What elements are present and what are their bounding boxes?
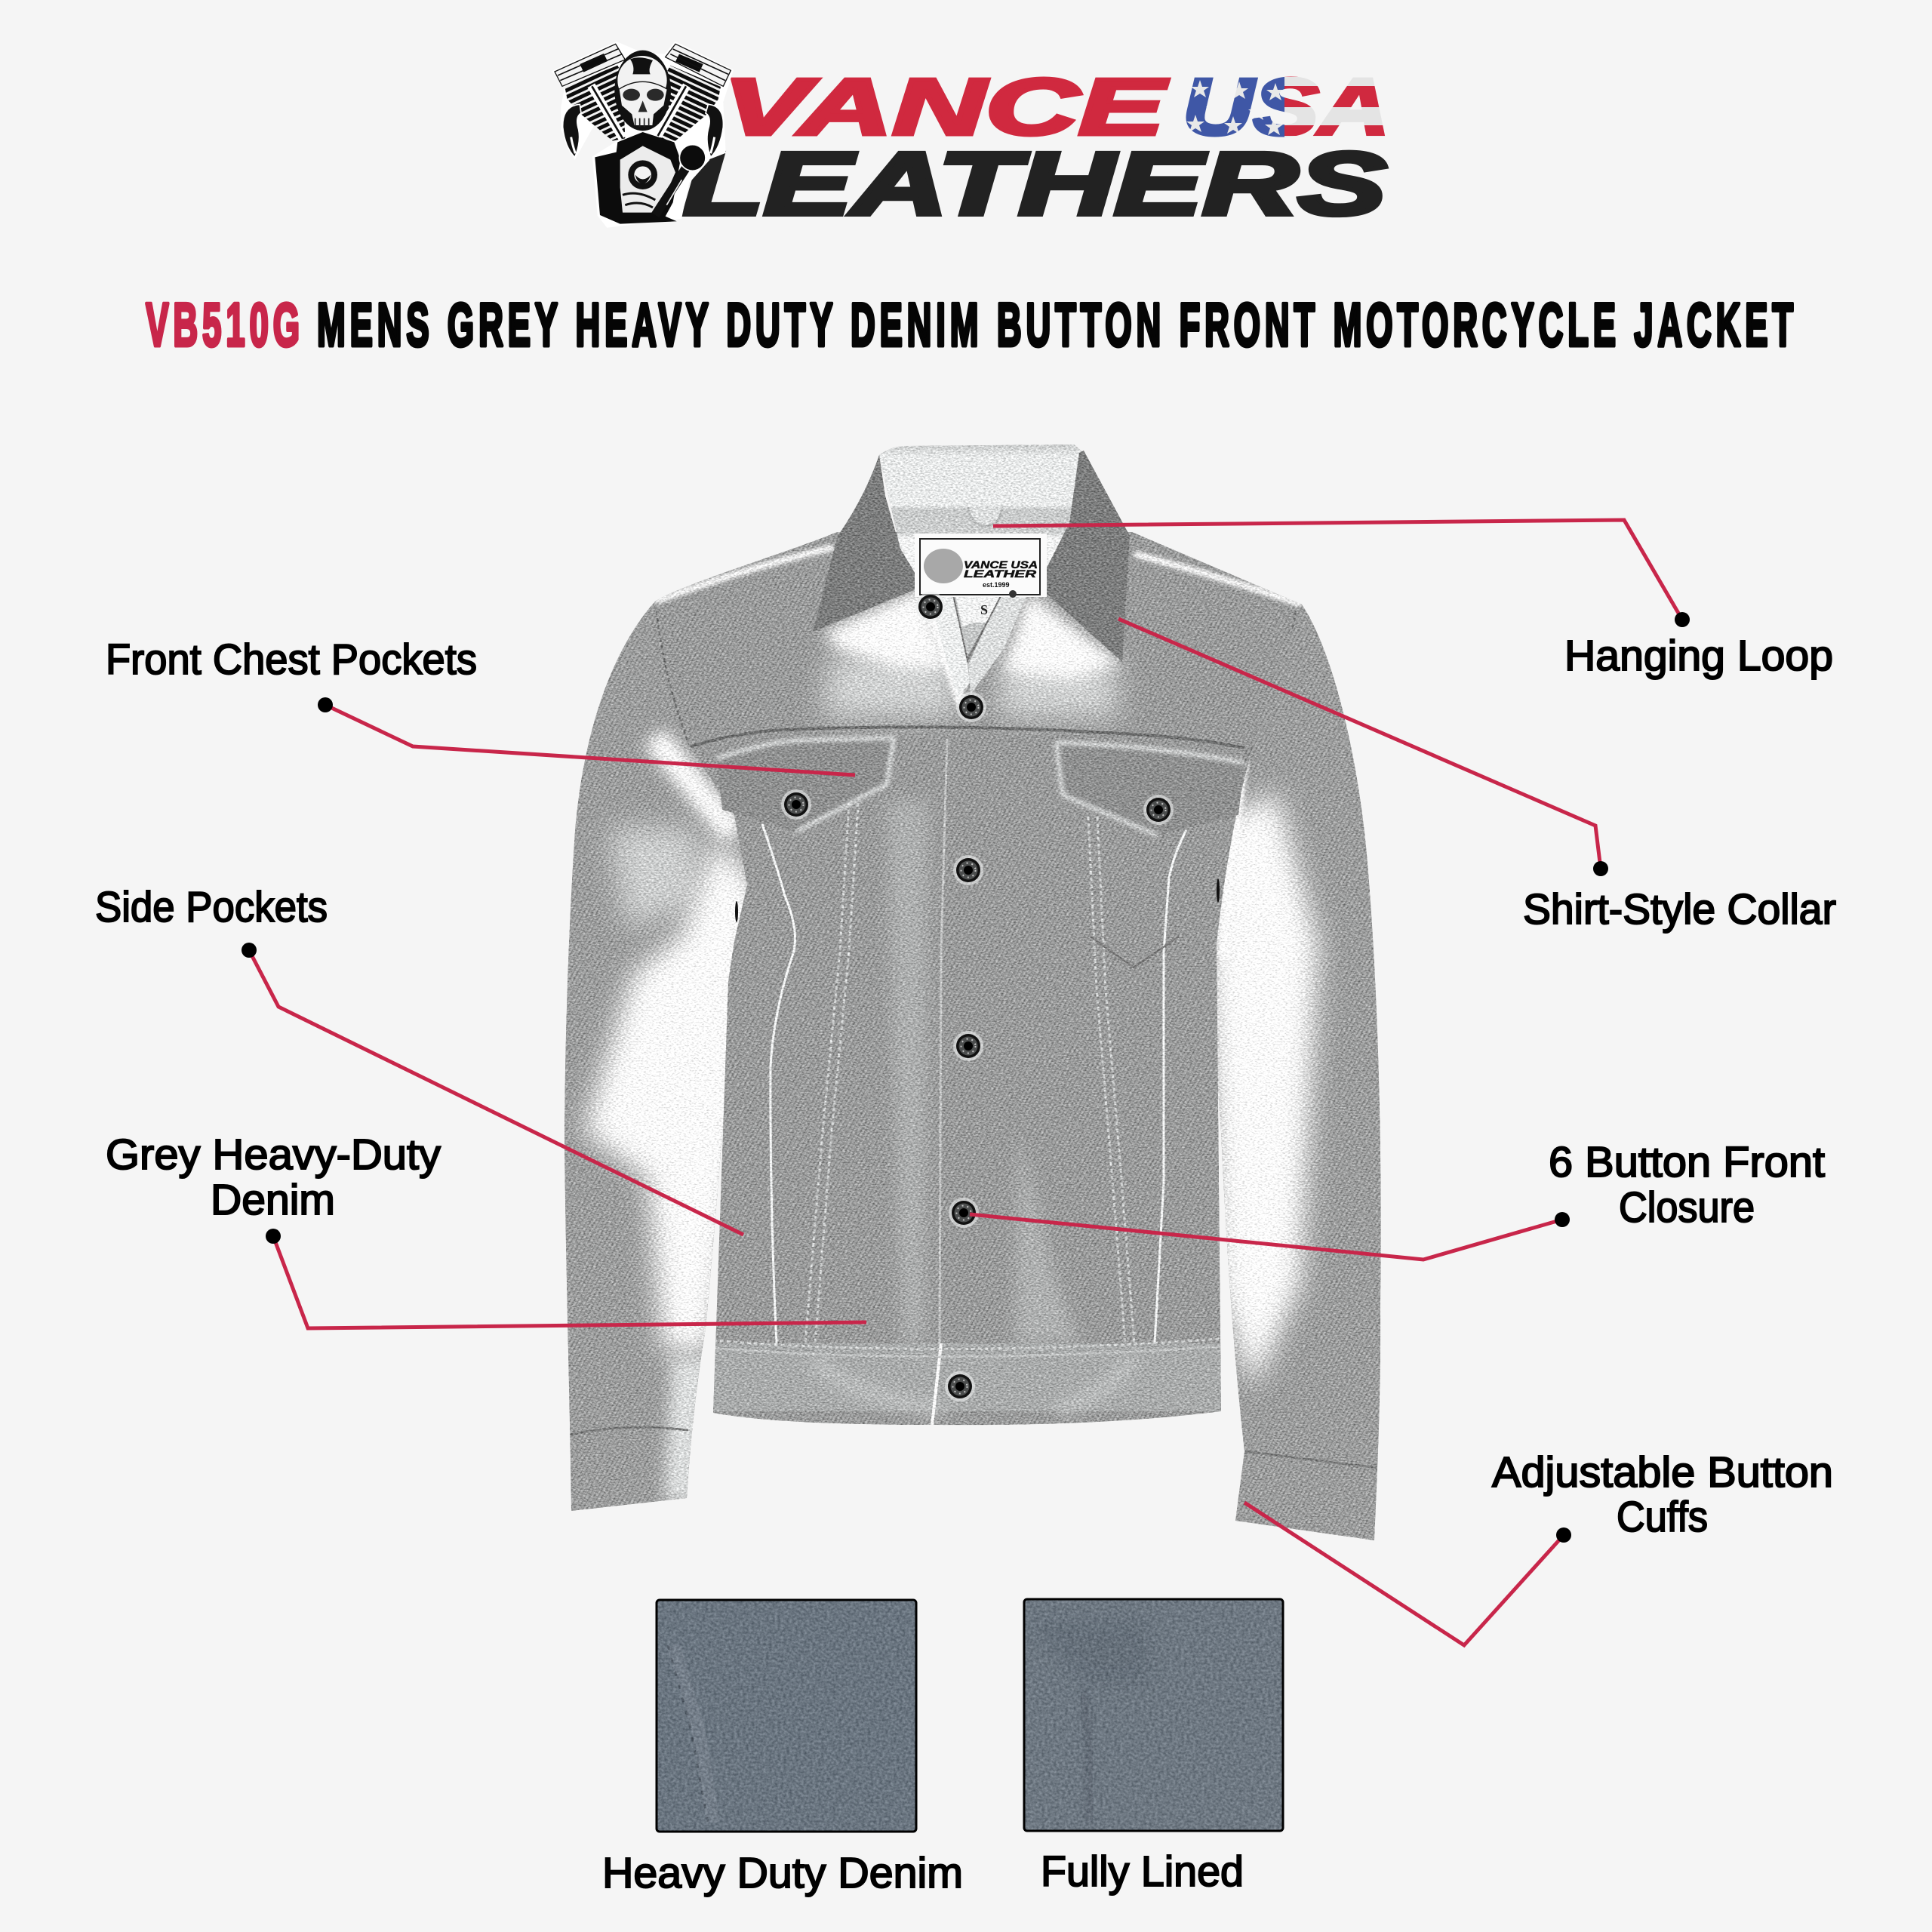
logo: Vance USA Leathers — [553, 43, 1389, 234]
jacket neck label — [915, 534, 1047, 597]
vertical panel seams — [762, 824, 795, 1343]
label: Front Chest Pockets: Front Chest Pockets — [106, 635, 477, 684]
collar back and hanging loop — [879, 445, 1084, 596]
callout: Side Pockets — [242, 943, 743, 1235]
callout: Adjustable Button Cuffs — [1244, 1503, 1571, 1645]
jacket illustration — [551, 445, 1389, 1555]
V stitch — [1091, 937, 1179, 968]
right pocket flap — [1057, 743, 1244, 835]
left sleeve — [565, 601, 747, 1511]
collar right — [1034, 451, 1130, 662]
placket seam — [940, 739, 947, 1343]
right sleeve — [1217, 605, 1381, 1540]
left pocket flap — [717, 738, 894, 832]
title — [146, 291, 1793, 358]
callout: Hanging Loop — [993, 520, 1690, 627]
callout: Grey Heavy-Duty Denim — [266, 1229, 866, 1328]
label: Adjustable Button Cuffs: Cuffs — [1617, 1493, 1708, 1541]
jacket buttons — [781, 590, 1174, 1401]
neck label brand second line: LEATHER — [964, 568, 1037, 580]
logo wordmark: VANCE: VANCE — [723, 63, 1168, 152]
label: Side Pockets: Side Pockets — [95, 883, 328, 931]
callout: Shirt-Style Collar — [1118, 619, 1608, 876]
label: Fully Lined: Fully Lined — [1041, 1847, 1244, 1896]
label: Grey Heavy-Duty Denim — [106, 1131, 441, 1224]
callout: Front Chest Pockets — [318, 697, 855, 775]
label: Heavy Duty Denim: Heavy Duty Denim — [602, 1849, 963, 1897]
collar left — [813, 455, 923, 632]
sleeve gap slivers — [735, 878, 1220, 922]
label: Hanging Loop: Hanging Loop — [1564, 632, 1833, 680]
jacket body — [649, 521, 1306, 1434]
label: Adjustable Button Cuffs — [1492, 1448, 1833, 1541]
title: product name: MENS GREY HEAVY DUTY DENIM BUTTON FRONT MOTORCYCLE JACKET — [317, 291, 1793, 358]
right armhole seam — [1244, 611, 1296, 762]
logo wordmark: LEATHERS: LEATHERS — [683, 134, 1386, 234]
neck label year: est.1999 — [983, 581, 1010, 589]
callout: 6 Button Front Closure — [970, 1212, 1570, 1260]
neck label engine icon — [924, 549, 963, 583]
label: 6 Button Front Closure: Closure — [1619, 1183, 1755, 1232]
swatch: Heavy Duty Denim — [657, 1600, 916, 1832]
jacket size tag: S — [980, 602, 988, 617]
yoke seam — [689, 727, 1244, 748]
neck opening and placket — [928, 592, 1028, 698]
title: product code: VB510G — [146, 291, 300, 358]
logo wordmark: USA with flag fill: USA — [1183, 63, 1389, 152]
neck label brand: VANCE USA — [964, 558, 1038, 571]
label: 6 Button Front Closure: 6 Button Front — [1549, 1138, 1825, 1186]
label: 6 Button Front Closure — [1549, 1138, 1825, 1232]
icon: skull engine — [553, 43, 732, 226]
label: Grey Heavy-Duty Denim: Grey Heavy-Duty — [106, 1131, 441, 1179]
label: Grey Heavy-Duty Denim: Denim — [211, 1176, 335, 1224]
label: Adjustable Button Cuffs: Adjustable Button — [1492, 1448, 1833, 1497]
swatch: Fully Lined — [1024, 1599, 1283, 1831]
waistband seam — [713, 1339, 1221, 1349]
label: Shirt-Style Collar: Shirt-Style Collar — [1523, 885, 1836, 934]
